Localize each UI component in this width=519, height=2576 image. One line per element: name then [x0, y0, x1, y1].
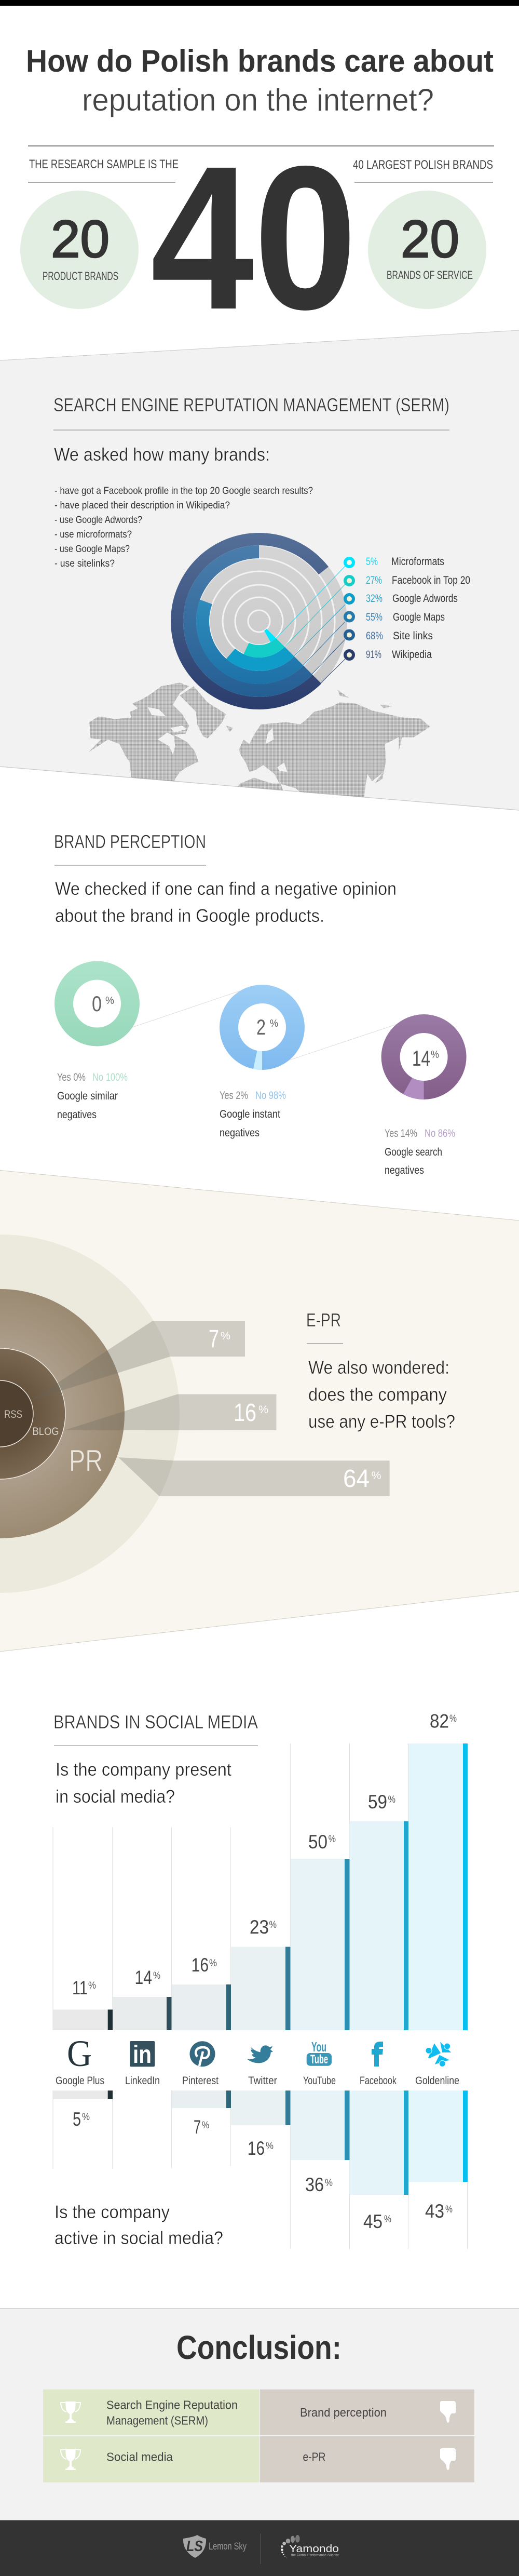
bar: blog 16%: 16 [234, 1399, 256, 1427]
icon labels: Google Plus [56, 2075, 104, 2087]
legend: Microformats [345, 556, 444, 568]
bar: LinkedIn 14%: % [153, 1970, 160, 1981]
icon: Pinterest [190, 2041, 215, 2067]
chart: present in social media [53, 1711, 468, 2030]
label: search: negatives [385, 1164, 424, 1176]
question list [54, 486, 313, 569]
question: present: Is the company present [56, 1760, 231, 1780]
question: present: in social media? [56, 1787, 175, 1807]
heading: brand perception: BRAND PERCEPTION [54, 831, 206, 852]
icon: YouTube: You [311, 2039, 326, 2055]
big number 40: 40 [151, 124, 357, 352]
legend: Wikipedia [345, 649, 432, 661]
legend: Google Adwords: Google Adwords [392, 593, 458, 605]
legend: Site links: Site links [393, 630, 433, 642]
bar: PR 64%: 64 [343, 1465, 370, 1493]
icons row [67, 2033, 452, 2074]
label: instant: negatives [220, 1127, 260, 1139]
bar: Google Plus 11%: % [88, 1980, 96, 1991]
legend: Google Maps: Google Maps [393, 611, 445, 623]
legend: Google Adwords: 32% [366, 593, 383, 605]
bar: Twitter 16% [231, 2090, 291, 2159]
world map [88, 682, 430, 797]
bar: Twitter 16%: % [266, 2141, 274, 2152]
bar: Pinterest 7%: 7 [194, 2116, 201, 2138]
heading: social media: BRANDS IN SOCIAL MEDIA [53, 1711, 258, 1733]
question: present [56, 1760, 231, 1807]
circle: product brands [20, 191, 139, 309]
bar: PR 64% [118, 1457, 390, 1496]
concentric circles [0, 1235, 180, 1593]
heading: conclusion: Conclusion: [176, 2329, 342, 2366]
bar: Goldenline 43%: 43 [425, 2201, 444, 2222]
label: similar: negatives [57, 1109, 97, 1121]
label: search [385, 1128, 455, 1176]
donut: Google instant negatives [220, 985, 305, 1070]
bar: Goldenline 82%: % [449, 1713, 457, 1724]
bar: Twitter 16%: 16 [248, 2138, 265, 2159]
donut: Google similar negatives: % [105, 995, 114, 1007]
circle: brands of service: BRANDS OF SERVICE [387, 269, 473, 281]
cell: e-PR: e-PR [303, 2450, 326, 2464]
bar: Google Plus 5%: % [82, 2112, 90, 2123]
donut: Google search negatives [381, 1014, 467, 1099]
cell: social media: Social media [106, 2450, 173, 2464]
cell: brand perception: Brand perception [300, 2406, 387, 2419]
intro text: We asked how many brands: [54, 445, 270, 465]
bar: YouTube 50%: 50 [308, 1831, 327, 1853]
bar: Pinterest 16% [171, 1954, 231, 2030]
top black bar [0, 0, 519, 6]
bar: Twitter 23%: % [269, 1920, 277, 1930]
icon labels [56, 2075, 459, 2087]
ring: Wikipedia 91% [171, 533, 329, 709]
footer [0, 2520, 519, 2576]
title: reputation on the internet? [82, 83, 434, 117]
question: active: Is the company [54, 2202, 170, 2222]
icon: LinkedIn: in [133, 2041, 152, 2069]
question text [308, 1358, 455, 1432]
bar: Facebook 59%: % [388, 1794, 395, 1805]
donut: Google search negatives: % [431, 1049, 439, 1061]
ring: Google Adwords 32% [226, 647, 294, 671]
cell: SERM: Search Engine Reputation [106, 2398, 238, 2412]
bar: YouTube 36%: % [325, 2178, 333, 2189]
label: similar: No 100% [92, 1071, 128, 1083]
panel: brands in social media [53, 1711, 468, 2249]
icon labels: LinkedIn [125, 2075, 160, 2087]
connector lines [132, 991, 397, 1060]
ring: Facebook 27% [243, 638, 284, 658]
bar: blog 16%: % [258, 1404, 268, 1416]
bar: YouTube 50% [291, 1831, 350, 2030]
question list: - use sitelinks? [54, 558, 115, 569]
bar: Goldenline 82%: 82 [430, 1711, 449, 1732]
bar: RSS 7% [32, 1321, 245, 1400]
bar: LinkedIn 14% [113, 1967, 171, 2030]
cell: SERM: Management (SERM) [106, 2414, 208, 2427]
bar: Goldenline 43% [408, 2090, 468, 2222]
bar: Google Plus 5% [53, 2090, 113, 2130]
leader lines [276, 566, 345, 683]
legend: Google Maps: 55% [366, 611, 383, 623]
chart: active in social media [53, 2090, 468, 2249]
question list: - use Google Maps? [54, 544, 130, 555]
bar: YouTube 36%: 36 [305, 2174, 324, 2195]
legend: Google Adwords [345, 593, 458, 605]
bar: Pinterest 7%: % [202, 2120, 209, 2131]
icon: Google Plus: G [67, 2033, 92, 2074]
bar: LinkedIn 14%: 14 [135, 1967, 152, 1988]
icon labels: Twitter [248, 2075, 277, 2087]
cell: SERM [43, 2390, 260, 2435]
legend [345, 556, 470, 661]
intro text [55, 879, 397, 926]
icon labels: YouTube [303, 2075, 336, 2087]
cell: e-PR [260, 2436, 474, 2483]
title: How do Polish brands care about [26, 44, 494, 78]
bar: Facebook 45%: % [384, 2214, 391, 2225]
question list: - use microformats? [54, 529, 132, 540]
bar: Facebook 45%: 45 [363, 2211, 383, 2232]
bar: Pinterest 16%: % [209, 1958, 217, 1969]
question text: use any e-PR tools? [308, 1412, 455, 1432]
question: active: active in social media? [54, 2228, 223, 2248]
label: instant: Yes 2% [220, 1090, 248, 1102]
label: PR: PR [69, 1444, 103, 1478]
bar: Pinterest 16%: 16 [192, 1954, 209, 1976]
question list: - use Google Adwords? [54, 515, 142, 526]
title [26, 44, 494, 117]
legend: Facebook in Top 20: 27% [366, 574, 382, 586]
icon: YouTube: Tube [310, 2052, 328, 2067]
bar: RSS 7%: % [221, 1330, 230, 1342]
question text: We also wondered: [308, 1358, 449, 1378]
circle: product brands: 20 [51, 210, 110, 269]
question: active [54, 2202, 223, 2248]
bar: Twitter 23%: 23 [250, 1916, 269, 1938]
question text: does the company [308, 1385, 447, 1405]
bar: Pinterest 7% [171, 2090, 231, 2138]
bar: Twitter 23% [231, 1916, 291, 2030]
bar: Google Plus 11% [53, 1977, 113, 2030]
legend: Microformats: 5% [366, 556, 378, 568]
label: search: Google search [385, 1146, 442, 1158]
cell: social media [43, 2436, 260, 2483]
logo: Lemon Sky [183, 2535, 247, 2558]
panel: e-PR [0, 1171, 519, 1652]
legend: Site links: 68% [366, 630, 383, 642]
bar: Goldenline 82% [408, 1711, 468, 2030]
panel: research sample [20, 124, 494, 352]
label: search: Yes 14% [385, 1128, 417, 1139]
heading: E-PR: E-PR [306, 1309, 341, 1331]
logo: Yamondo [281, 2535, 339, 2558]
icon: Facebook [372, 2042, 383, 2067]
icon: YouTube [307, 2039, 332, 2067]
bar: Facebook 45% [350, 2090, 408, 2232]
circle: product brands: PRODUCT BRANDS [43, 270, 118, 283]
icon: Twitter [247, 2045, 273, 2063]
donut: Google instant negatives: % [270, 1018, 278, 1029]
legend: Site links [345, 630, 433, 642]
panel: conclusion [0, 2309, 519, 2520]
bar: Facebook 59%: 59 [368, 1791, 387, 1813]
legend: Microformats: Microformats [391, 556, 444, 568]
bar: Google Plus 5%: 5 [73, 2109, 81, 2130]
circle: brands of service: 20 [401, 210, 459, 269]
donut: Google similar negatives [54, 961, 140, 1046]
bar: YouTube 50%: % [329, 1834, 336, 1845]
logo: Yamondo: the Global Performance Alliance [291, 2553, 339, 2557]
circle: brands of service [368, 191, 486, 309]
legend: Wikipedia: 91% [366, 649, 381, 661]
sample text left: THE RESEARCH SAMPLE IS THE [29, 157, 179, 171]
donut: Google search negatives: 14 [412, 1046, 430, 1070]
label: instant: No 98% [255, 1090, 286, 1102]
label: BLOG: BLOG [32, 1426, 59, 1438]
icon labels: Pinterest [182, 2075, 218, 2087]
donut: Google instant negatives: 2 [256, 1015, 266, 1039]
ring: Google Maps 55% [196, 600, 304, 684]
bar: Google Plus 11%: 11 [72, 1977, 88, 1998]
label: similar: Google similar [57, 1090, 118, 1102]
icon: Goldenline [426, 2041, 452, 2067]
cell: brand perception [260, 2390, 474, 2435]
label: similar [57, 1071, 128, 1121]
logo: Yamondo: Yamondo [289, 2543, 339, 2555]
label: instant: Google instant [220, 1108, 280, 1120]
panel: brand perception [54, 831, 467, 1176]
bar: blog 16% [64, 1394, 276, 1430]
legend: Google Maps [345, 611, 445, 623]
label: instant [220, 1090, 286, 1139]
ring: Site links 68% [183, 545, 312, 697]
panel: SERM [0, 330, 519, 837]
legend: Wikipedia: Wikipedia [392, 649, 432, 661]
bar: PR 64%: % [372, 1470, 381, 1482]
legend: Facebook in Top 20 [345, 574, 470, 586]
ring: Microformats 5% [264, 629, 276, 642]
bar: YouTube 36% [291, 2090, 350, 2195]
icon labels: Facebook [360, 2075, 397, 2087]
question list: - have placed their description in Wikipedia? [54, 500, 230, 511]
bar: RSS 7%: 7 [209, 1325, 219, 1353]
question list: - have got a Facebook profile in the top 20 Google search results? [54, 486, 313, 497]
label: search: No 86% [425, 1128, 455, 1139]
icon labels: Goldenline [415, 2075, 459, 2087]
intro text: We checked if one can find a negative opinion [55, 879, 397, 899]
bar: Facebook 59% [350, 1791, 408, 2030]
donut: Google similar negatives: 0 [92, 991, 102, 1016]
logo: Lemon Sky: Lemon Sky [209, 2541, 247, 2552]
label: RSS: RSS [4, 1408, 22, 1420]
logo: Lemon Sky: LS [186, 2538, 203, 2555]
legend: Facebook in Top 20: Facebook in Top 20 [392, 574, 470, 586]
label: similar: Yes 0% [57, 1071, 86, 1083]
bar: Goldenline 43%: % [445, 2204, 453, 2215]
radial chart [171, 533, 347, 709]
intro text: about the brand in Google products. [55, 906, 324, 926]
